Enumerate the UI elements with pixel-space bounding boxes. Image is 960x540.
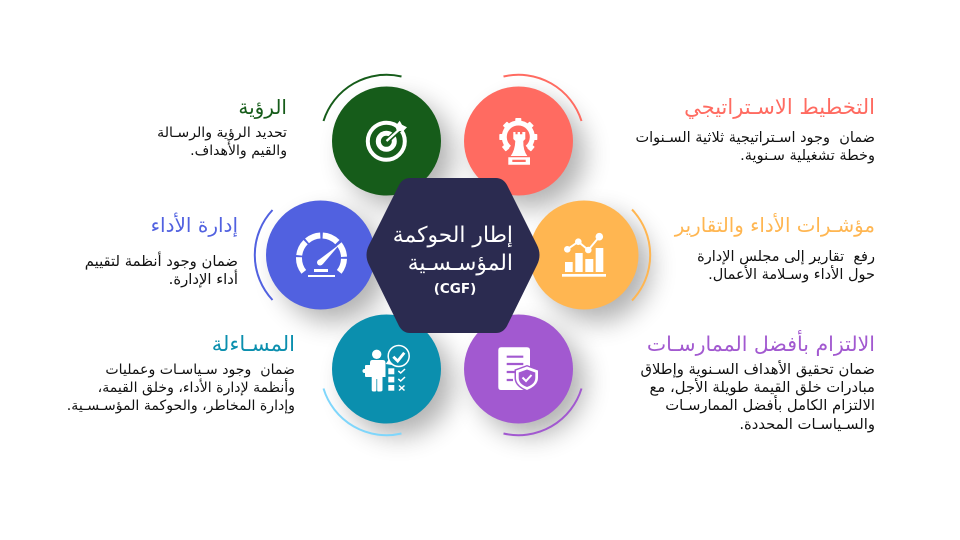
text: accountability: وأنظمة لإدارة الأداء، وخلق القيمة، [98,380,295,396]
circle: indicators and reports [530,200,651,322]
text: strategic planning: وخطة تشغيلية سـنوية. [740,148,875,164]
center abbreviation: (CGF) [434,281,476,297]
text: best practices: الالتزام بأفضل الممارسـات [647,332,875,356]
icon: speedometer [299,236,344,277]
text: performance management: أداء الإدارة. [169,271,238,288]
text: strategic planning: ضمان وجود اسـتراتيجية ثلاثية السـنوات [635,130,875,146]
text: vision: الرؤية [238,95,287,119]
text: accountability: ضمان وجود سـياسـات وعمليات [105,362,295,378]
text: vision [157,95,287,159]
center title [393,223,513,276]
text: vision: تحديد الرؤية والرسـالة [157,125,287,141]
icon: person with checklist [362,346,409,392]
text: best practices [640,330,875,433]
circle: strategic planning [464,75,585,208]
text: accountability: المسـاءلة [212,332,295,356]
circle: accountability [324,314,453,436]
text: performance management: إدارة الأداء [151,213,238,237]
icon: bar chart with trend line [562,233,606,277]
text: strategic planning [635,95,875,164]
text: accountability [67,332,295,414]
text: performance management [85,212,238,288]
central hexagon [366,178,540,333]
icon: gear with chess rook [499,118,537,165]
text: indicators and reports [674,213,875,283]
text: vision: والقيم والأهداف. [190,143,287,159]
text: indicators and reports: مؤشـرات الأداء والتقارير [675,214,875,237]
text: indicators and reports: حول الأداء وسـلامة الأعمال. [708,267,875,283]
center title: إطار الحوكمة [393,223,513,248]
text: best practices: ضمان تحقيق الأهداف السـنوية وإطلاق [640,361,875,378]
text: best practices: الالتزام الكامل بأفضل الممارسـات [665,397,875,414]
text: accountability: وإدارة المخاطر، والحوكمة المؤسـسـية. [67,398,295,414]
text: indicators and reports: رفع تقارير إلى مجلس الإدارة [697,249,875,265]
icon: target [368,121,407,160]
text: best practices: والسـياسـات المحددة. [739,416,875,433]
circle: performance management [255,200,387,322]
icon: document with shield [498,347,540,392]
center title: المؤسـسـية [408,251,513,276]
circle: best practices [464,314,585,436]
circle: vision [324,75,453,208]
text: best practices: مبادرات خلق القيمة طويلة الأجل، مع [650,379,875,396]
text: strategic planning: التخطيط الاسـتراتيجي [684,95,875,119]
text: performance management: ضمان وجود أنظمة لتقييم [85,253,238,270]
